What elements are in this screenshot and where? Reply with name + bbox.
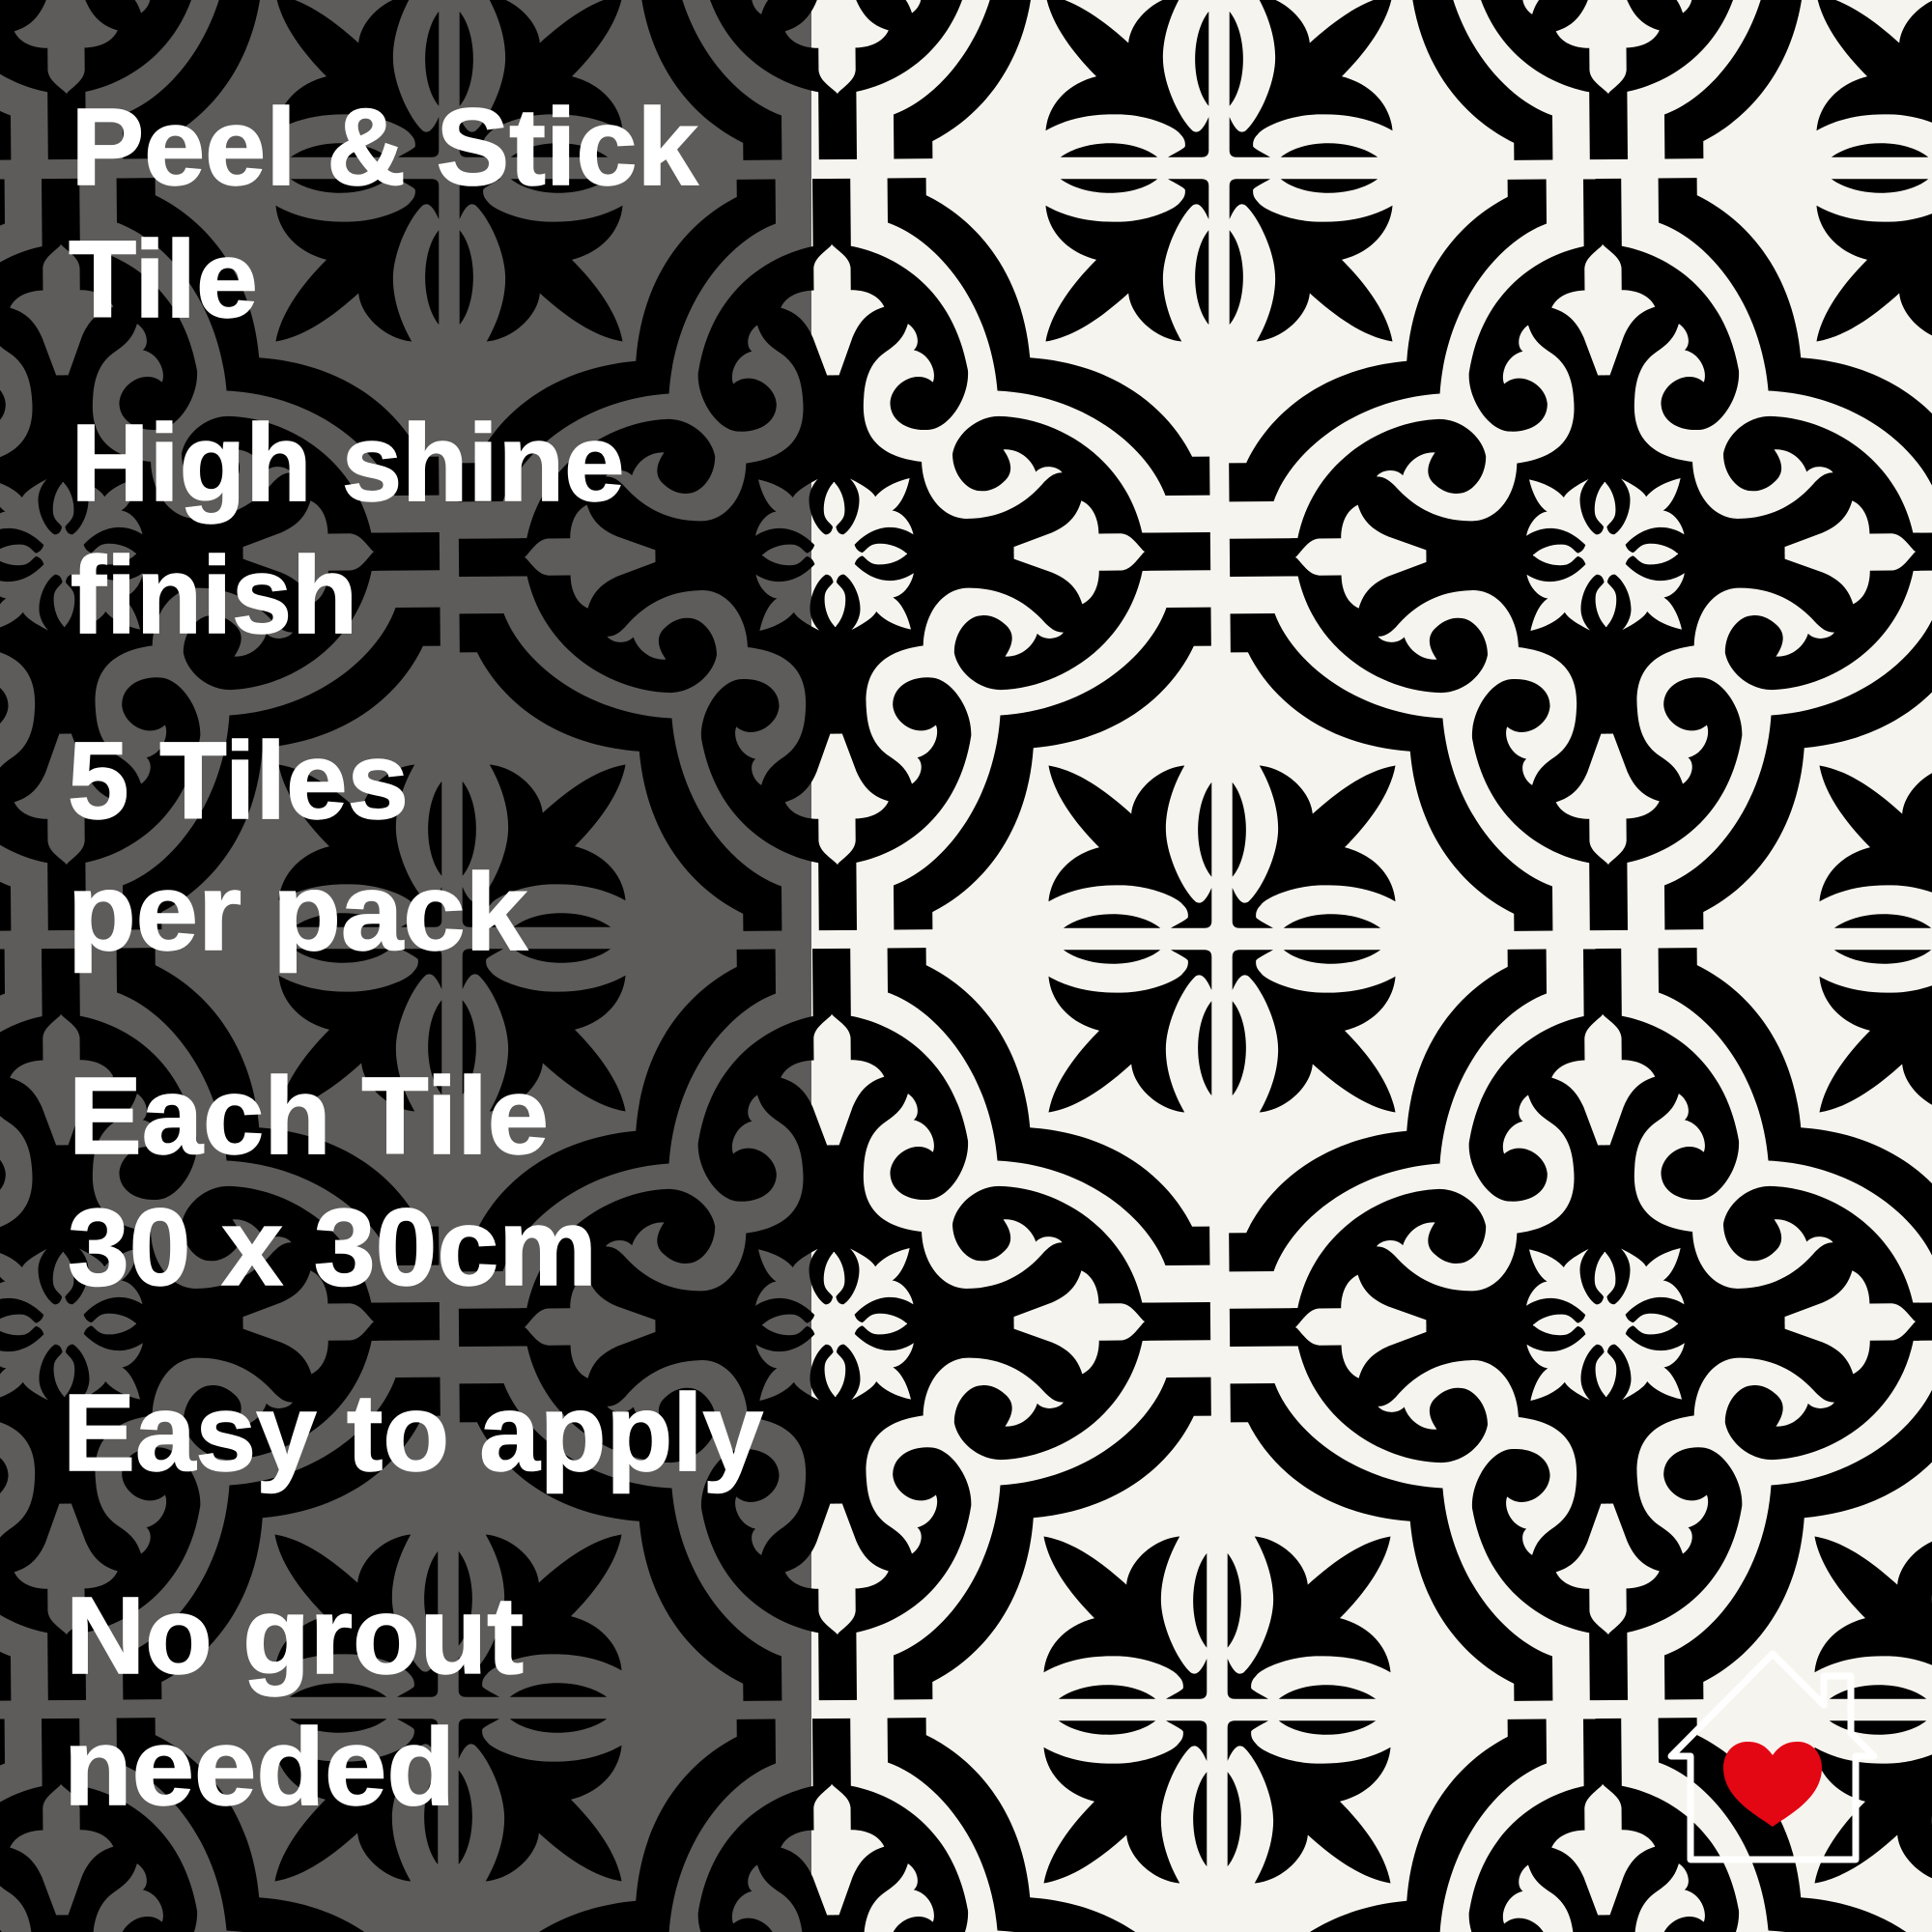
feature: peel and stick tile (69, 86, 698, 340)
feature: peel and stick tile: Peel & Stick (71, 86, 698, 208)
feature: 5 tiles per pack (68, 720, 527, 973)
feature: no grout needed: No grout (66, 1575, 524, 1696)
feature: easy to apply: Easy to apply (63, 1372, 763, 1493)
feature: peel and stick tile: Tile (69, 218, 258, 340)
feature: each tile size (68, 1055, 597, 1308)
dark translucent panel (0, 0, 811, 1932)
feature: each tile size: Each Tile (69, 1055, 549, 1177)
icon: house with heart logo (1671, 1654, 1874, 1860)
feature: no grout needed: needed (64, 1706, 455, 1828)
feature: high shine finish: finish (71, 534, 357, 656)
feature: high shine finish: High shine (71, 402, 624, 524)
feature: each tile size: 30 x 30cm (68, 1186, 597, 1308)
feature: 5 tiles per pack: per pack (68, 851, 527, 973)
feature: 5 tiles per pack: 5 Tiles (68, 720, 409, 841)
feature: no grout needed (64, 1575, 524, 1828)
feature: high shine finish (71, 402, 624, 656)
